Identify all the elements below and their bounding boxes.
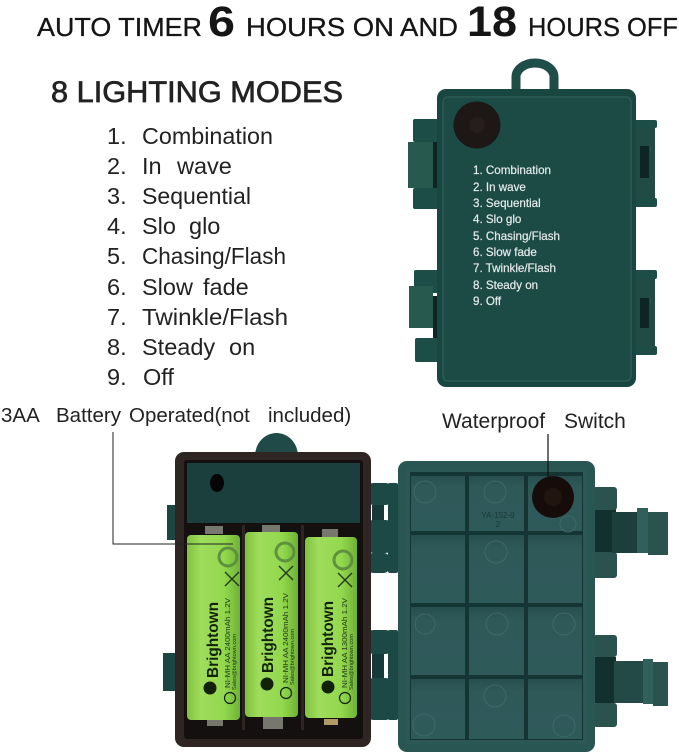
list of lighting modes: Sequential [142,183,251,209]
heading: 8 lighting modes: 8 LIGHTING MODES [51,76,343,109]
list of lighting modes: 2. [107,153,127,179]
label: waterproof switch: Switch [564,410,626,433]
tray hinges [368,483,391,720]
title [37,0,678,46]
printed modes: 7. Twinkle/Flash [473,262,556,275]
dividers [242,525,245,730]
list of lighting modes: 8. [107,334,127,360]
list of lighting modes: glo [189,213,220,239]
callout line: battery [113,432,233,544]
battery 1 [187,535,240,720]
printed modes: 4. Slo glo [473,213,521,226]
printed modes: 1. Combination [473,164,551,177]
list of lighting modes: 5. [107,243,127,269]
label: battery: included) [268,404,351,427]
printed modes: 2. In wave [473,181,526,194]
callout line: switch [547,434,549,482]
label: battery: 3AA [1,404,40,427]
title: HOURS ON AND [246,14,458,42]
title: HOURS OFF [528,14,678,42]
list of lighting modes: wave [176,153,232,179]
list of lighting modes: Chasing/Flash [142,243,286,269]
list of lighting modes: 4. [107,213,127,239]
list of lighting modes: Steady [142,334,215,360]
left hinge of lid [388,483,398,720]
battery 2: NI-MH AA 2400mAh 1.2V [283,593,290,683]
list of lighting modes: Slo [142,213,176,239]
printed modes [473,164,560,308]
body [398,461,595,752]
printed modes: 6. Slow fade [473,246,537,259]
battery 3: Sales@brightown.com [349,634,355,690]
battery 1: Sales@brightown.com [232,634,238,690]
switch button [454,102,500,148]
label: battery: Operated(not [129,404,250,427]
printed modes: 5. Chasing/Flash [473,230,560,243]
battery 2: Brightown [260,597,277,673]
battery 3 [305,537,357,718]
battery 1: Brightown [205,602,222,678]
springs [205,525,338,729]
side tabs [167,505,179,540]
list of lighting modes: Combination [142,123,273,149]
moulding marks [413,481,576,737]
list of lighting modes: Twinkle/Flash [142,304,288,330]
right clips [630,120,657,355]
battery 1: NI-MH AA 2400mAh 1.2V [225,598,232,688]
open box: lid interior [398,461,668,752]
hanging loop [255,433,298,456]
battery cover [187,463,360,523]
list of lighting modes: 6. [107,274,127,300]
list of lighting modes [107,123,288,390]
compartments [411,476,582,739]
list of lighting modes: 7. [107,304,127,330]
list of lighting modes: Off [143,364,174,390]
list of lighting modes: 3. [107,183,127,209]
body [437,89,636,387]
label: battery: Battery [56,404,122,427]
open box: lid interior: 2 [496,520,501,529]
list of lighting modes: 9. [107,364,127,390]
printed modes: 9. Off [473,295,502,308]
mould code: YA-152-9 [481,511,515,520]
battery 2: Sales@brightown.com [290,629,296,685]
hanging loop [516,63,554,92]
list of lighting modes: 1. [107,123,127,149]
battery 3: NI-MH AA 1300mAh 1.2V [342,598,349,688]
list of lighting modes: In [142,153,162,179]
list of lighting modes: Slow [142,274,194,300]
open box: battery tray [163,433,391,747]
list of lighting modes: fade [203,274,249,300]
battery 2 [245,532,298,717]
battery 3: Brightown [320,601,337,677]
list of lighting modes: on [229,334,255,360]
closed battery box [408,63,657,387]
title: AUTO TIMER [37,14,202,42]
right clips [590,487,668,727]
printed modes: 3. Sequential [473,197,541,210]
left hinges [408,119,444,362]
label: waterproof switch: Waterproof [442,410,545,433]
tray body [175,452,371,747]
waterproof switch [532,476,574,518]
printed modes: 8. Steady on [473,279,538,292]
